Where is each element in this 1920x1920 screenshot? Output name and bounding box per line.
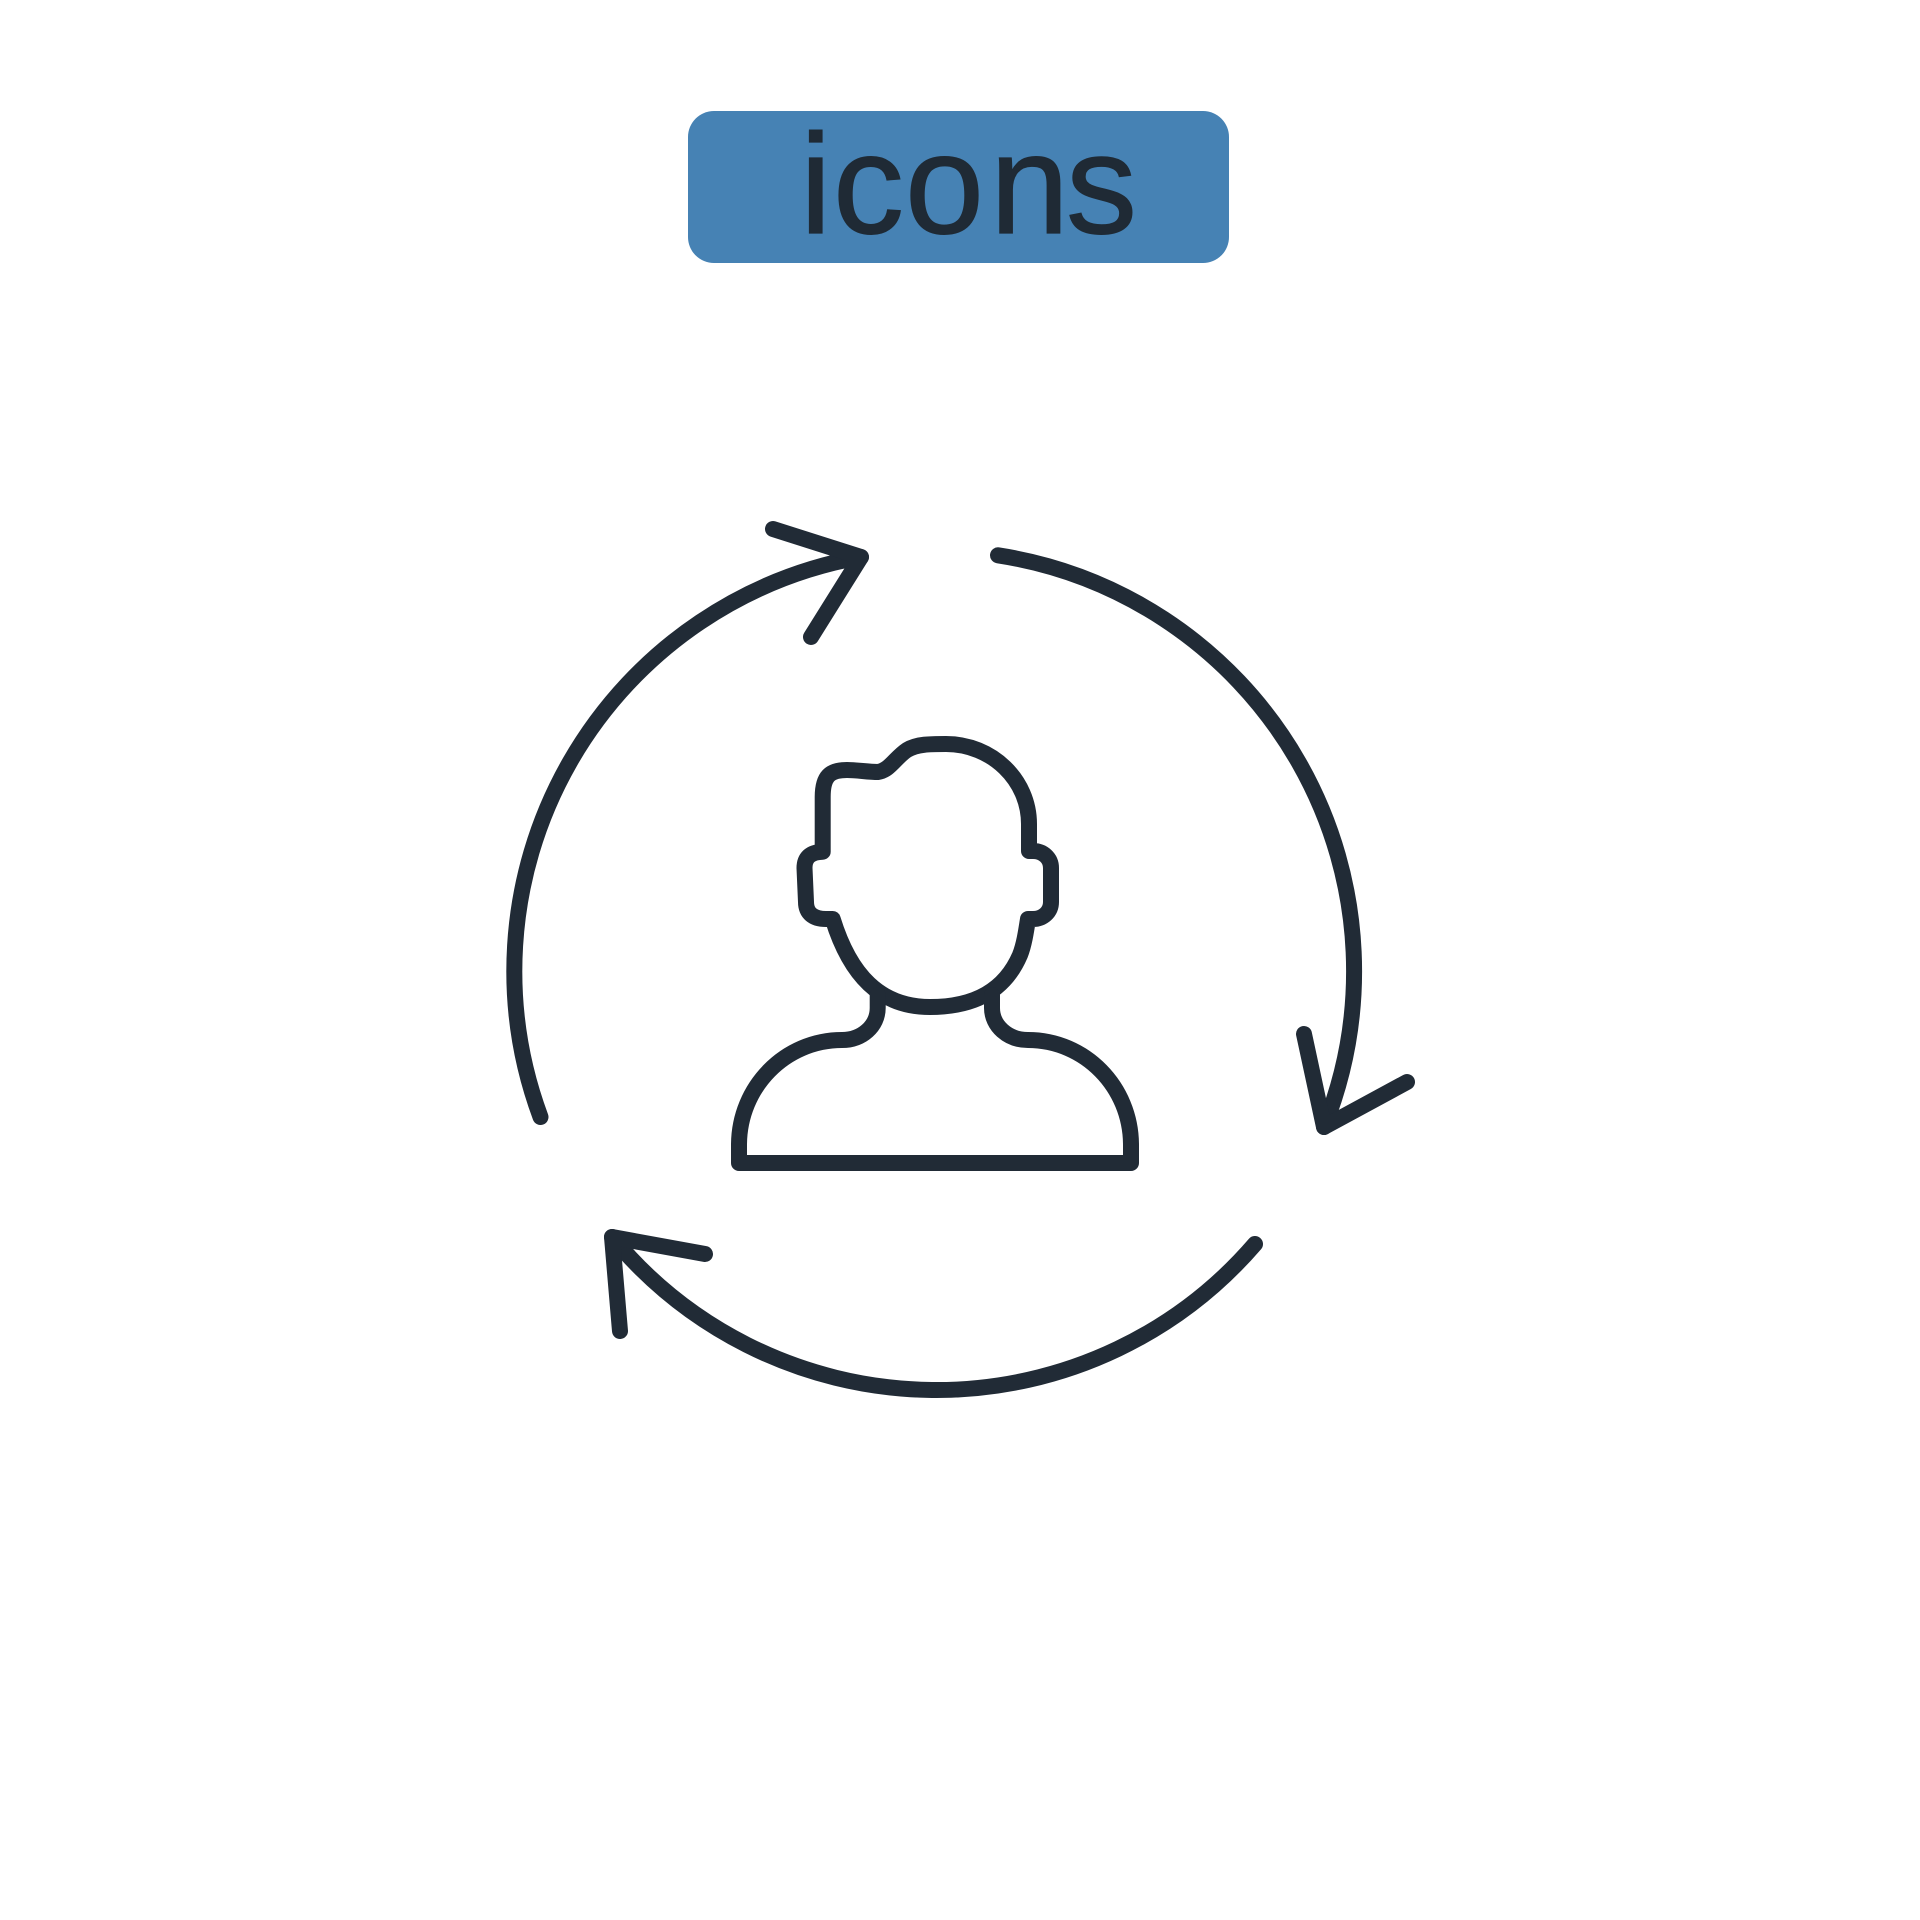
person neck and shoulders bbox=[739, 995, 1131, 1163]
arrow: bottom arc bbox=[612, 1237, 1255, 1390]
header badge bbox=[688, 105, 1229, 264]
icon: cycle with person bbox=[514, 529, 1407, 1390]
icon: person bbox=[739, 744, 1131, 1163]
person head bbox=[804, 744, 1051, 1007]
arrow: right arc bbox=[998, 555, 1407, 1127]
arrow: left arc bbox=[514, 529, 861, 1117]
badge label: icons bbox=[800, 105, 1137, 264]
badge background bbox=[688, 111, 1229, 263]
